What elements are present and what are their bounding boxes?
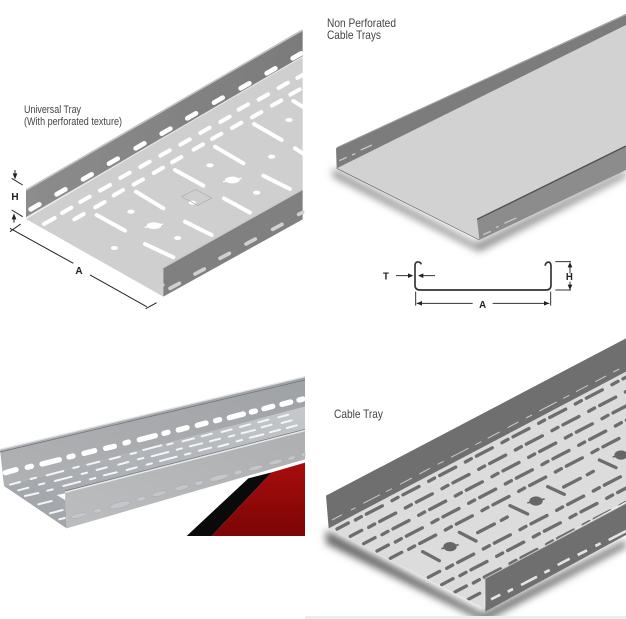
illustration: perforated universal tray bbox=[26, 30, 303, 297]
label: non perforated cable trays: Cable Trays bbox=[327, 28, 381, 42]
dimension lines: H and A: A bbox=[75, 266, 83, 277]
bottom edge line bbox=[305, 616, 626, 619]
label: universal tray: (With perforated texture) bbox=[24, 116, 122, 128]
label: universal tray: Universal Tray bbox=[24, 104, 81, 116]
label: cable tray: Cable Tray bbox=[334, 407, 383, 421]
illustration: slotted cable tray bbox=[326, 338, 626, 619]
panel: universal tray bbox=[10, 30, 303, 309]
dimension lines: H and A: H bbox=[11, 192, 19, 203]
panel: non perforated cable trays bbox=[327, 14, 626, 311]
profile diagram: T, H and A dimensions: A bbox=[479, 300, 486, 311]
label: non perforated cable trays: Non Perforated bbox=[327, 16, 396, 30]
profile diagram: T, H and A dimensions: T bbox=[383, 272, 389, 283]
profile diagram: T, H and A dimensions: H bbox=[566, 272, 573, 283]
profile diagram: T, H and A dimensions bbox=[383, 262, 573, 311]
dimension lines: H and A bbox=[10, 170, 157, 309]
background: red and black shape bbox=[187, 463, 305, 536]
illustration: galvanized perforated tray bbox=[0, 377, 305, 528]
panel: cable tray bbox=[305, 338, 626, 619]
panel: galvanized tray photo bbox=[0, 377, 305, 536]
illustration: solid tray bbox=[333, 14, 626, 252]
